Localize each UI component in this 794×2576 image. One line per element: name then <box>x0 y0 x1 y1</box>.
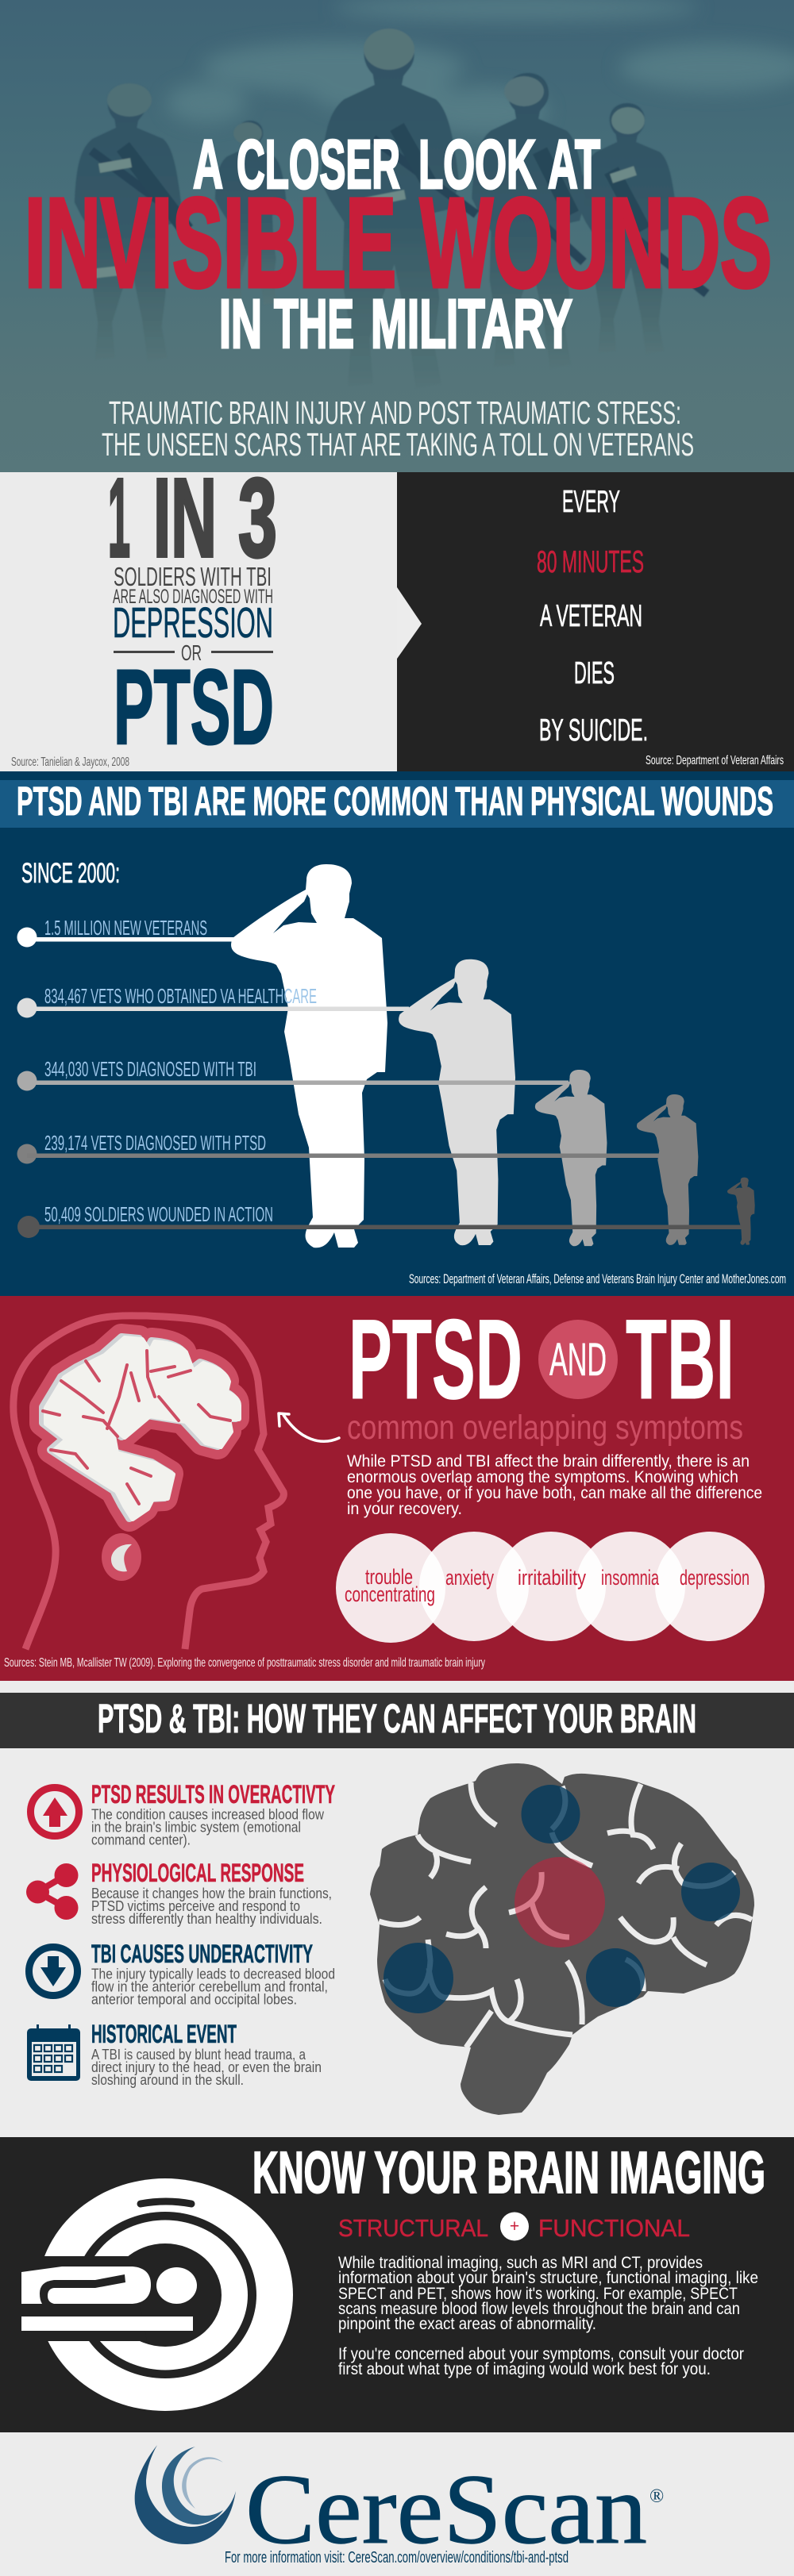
icon: down arrow <box>29 1947 78 1995</box>
panel: 1 in 3 statistic: SOLDIERS WITH TBI <box>114 562 272 591</box>
block: TBI underactivity: The injury typically leads to decreased blood <box>91 1967 335 1982</box>
paragraph: one you have, or if you have both, can make all the difference <box>347 1484 762 1502</box>
block: PTSD overactivity: PTSD RESULTS IN OVERACTIVTY <box>91 1780 335 1809</box>
panel: 1 in 3 statistic: ARE ALSO DIAGNOSED WITH <box>113 586 273 608</box>
title <box>25 126 772 363</box>
sources: Sources: Stein MB, Mcallister TW (2009). Exploring the convergence of posttraumatic stress disorder and mild traumatic brain injury <box>4 1656 485 1670</box>
paragraph: imaging: first about what type of imaging would work best for you. <box>338 2360 711 2378</box>
panel: 1 in 3 statistic: PTSD <box>114 648 274 767</box>
bar: 1.5 million new veterans <box>17 916 237 948</box>
symptom circles: irritability <box>518 1566 586 1590</box>
panel: every 80 minutes statistic: 80 MINUTES <box>537 545 644 579</box>
block: physiological response: stress differently than healthy individuals. <box>91 1911 322 1927</box>
hero soldiers <box>75 29 707 388</box>
panel: every 80 minutes statistic: EVERY <box>562 485 620 519</box>
logo: CereScan wordmark: CereScan <box>245 2455 647 2565</box>
title: THE <box>274 286 354 363</box>
panel: every 80 minutes statistic <box>397 472 794 771</box>
paragraph: enormous overlap among the symptoms. Knowing which <box>347 1468 738 1486</box>
paragraph: imaging: SPECT and PET, shows how it's working. For example, SPECT <box>338 2285 738 2303</box>
icon: MRI scanner <box>0 2178 293 2411</box>
icon: share nodes <box>26 1863 78 1920</box>
panel: CereScan footer <box>0 2432 794 2576</box>
block: PTSD overactivity <box>91 1780 335 1847</box>
paragraph: imaging: information about your brain's structure, functional imaging, like <box>338 2269 758 2287</box>
icon: calendar <box>27 2024 80 2081</box>
panel: every 80 minutes statistic: BY SUICIDE. <box>539 713 648 748</box>
panel: 1 in 3 statistic: IN <box>153 455 217 580</box>
block: physiological response <box>91 1859 332 1927</box>
panel: physical wounds comparison <box>0 771 794 1297</box>
panel: how they can affect your brain <box>0 1681 794 2137</box>
subheading: structural plus functional: STRUCTURAL <box>338 2214 488 2242</box>
block: historical event <box>91 2020 322 2088</box>
block: historical event: direct injury to the head, or even the brain <box>91 2059 322 2075</box>
bar: 1.5 million new veterans: 1.5 MILLION NEW VETERANS <box>44 916 207 940</box>
bar: diagnosed with PTSD: 239,174 VETS DIAGNOSED WITH PTSD <box>44 1131 266 1155</box>
subheading: structural plus functional: FUNCTIONAL <box>538 2214 690 2242</box>
paragraph: in your recovery. <box>347 1500 462 1518</box>
panel: every 80 minutes statistic: DIES <box>574 656 615 690</box>
bar: diagnosed with TBI: 344,030 VETS DIAGNOSED WITH TBI <box>44 1057 256 1081</box>
bar: VA healthcare <box>17 984 409 1017</box>
symptom circles: depression <box>680 1566 750 1590</box>
title: CLOSER <box>237 126 400 203</box>
block: PTSD overactivity: The condition causes increased blood flow <box>91 1806 325 1822</box>
title: A <box>193 126 223 203</box>
logo: swirl <box>135 2445 236 2544</box>
panel: 1 in 3 statistic: 3 <box>238 455 277 580</box>
hero clouds <box>167 0 794 135</box>
paragraph <box>347 1452 762 1518</box>
arrow <box>279 1413 339 1441</box>
icon: head outline with brain <box>13 1316 283 1649</box>
symptom circles: anxiety <box>445 1566 494 1590</box>
bar: VA healthcare: 834,467 VETS WHO OBTAINED VA HEALTHCARE <box>44 984 317 1008</box>
block: historical event: sloshing around in the skull. <box>91 2072 244 2088</box>
panel: 1 in 3 statistic: DEPRESSION <box>113 599 273 647</box>
panel: hero <box>0 0 794 473</box>
title: INVISIBLE <box>25 171 396 313</box>
block: physiological response: PTSD victims perceive and respond to <box>91 1898 300 1914</box>
highlighted regions <box>384 1785 740 2013</box>
registered mark: ® <box>649 2486 664 2507</box>
panel: PTSD and TBI symptoms <box>0 1296 794 1681</box>
title: AT <box>548 126 600 203</box>
since 2000 label: SINCE 2000: <box>21 858 120 889</box>
title: MILITARY <box>371 286 572 363</box>
bar: diagnosed with TBI <box>17 1057 569 1090</box>
subheading: structural plus functional: + <box>510 2217 519 2236</box>
title: LOOK <box>418 126 536 203</box>
soldier silhouettes <box>231 864 755 1248</box>
symptom circles: concentrating <box>345 1582 435 1606</box>
block: TBI underactivity: TBI CAUSES UNDERACTIVITY <box>91 1940 313 1968</box>
heading: PTSD and TBI: AND <box>549 1334 607 1386</box>
symptom circles: insomnia <box>601 1566 660 1590</box>
subtitle <box>102 394 694 463</box>
block: TBI underactivity: anterior temporal and occipital lobes. <box>91 1992 297 2008</box>
paragraph: imaging: If you're concerned about your symptoms, consult your doctor <box>338 2345 744 2363</box>
title: IN <box>219 286 262 363</box>
symptom circles: trouble <box>365 1565 413 1589</box>
symptom circles <box>336 1532 765 1643</box>
paragraph: imaging: pinpoint the exact areas of abnormality. <box>338 2315 596 2333</box>
panel: 1 in 3 statistic: 1 <box>108 455 130 580</box>
panel: 1 in 3 statistic: OR <box>181 640 202 665</box>
block: historical event: A TBI is caused by blunt head trauma, a <box>91 2047 306 2063</box>
block: TBI underactivity <box>91 1940 335 2008</box>
bar: wounded in action: 50,409 SOLDIERS WOUNDED IN ACTION <box>44 1202 273 1226</box>
paragraph: imaging <box>338 2254 758 2378</box>
subheading: structural plus functional <box>338 2213 690 2242</box>
block: physiological response: PHYSIOLOGICAL RESPONSE <box>91 1859 304 1887</box>
bar: wounded in action <box>17 1202 742 1238</box>
block: physiological response: Because it changes how the brain functions, <box>91 1886 332 1901</box>
block: PTSD overactivity: in the brain's limbic system (emotional <box>91 1819 301 1835</box>
block: TBI underactivity: flow in the anterior cerebellum and frontal, <box>91 1979 328 1995</box>
block: PTSD overactivity: command center). <box>91 1832 191 1847</box>
footer link text: For more information visit: CereScan.com/overview/conditions/tbi-and-ptsd <box>225 2549 569 2566</box>
bar: diagnosed with PTSD <box>17 1131 659 1163</box>
block: historical event: HISTORICAL EVENT <box>91 2020 237 2048</box>
heading: PTSD and TBI: PTSD <box>349 1297 522 1423</box>
panel: every 80 minutes statistic: A VETERAN <box>540 599 642 633</box>
paragraph: imaging: While traditional imaging, such as MRI and CT, provides <box>338 2254 703 2272</box>
panel: know your brain imaging <box>0 2137 794 2432</box>
paragraph: While PTSD and TBI affect the brain differently, there is an <box>347 1452 750 1471</box>
paragraph: imaging: scans measure blood flow levels throughout the brain and can <box>338 2300 740 2318</box>
panel: 1 in 3 statistic <box>0 455 397 771</box>
brain diagram <box>370 1763 754 2115</box>
icon: up arrow <box>30 1787 79 1836</box>
panel: 1 in 3 statistic: Source: Tanielian & Jaycox, 2008 <box>11 755 129 769</box>
